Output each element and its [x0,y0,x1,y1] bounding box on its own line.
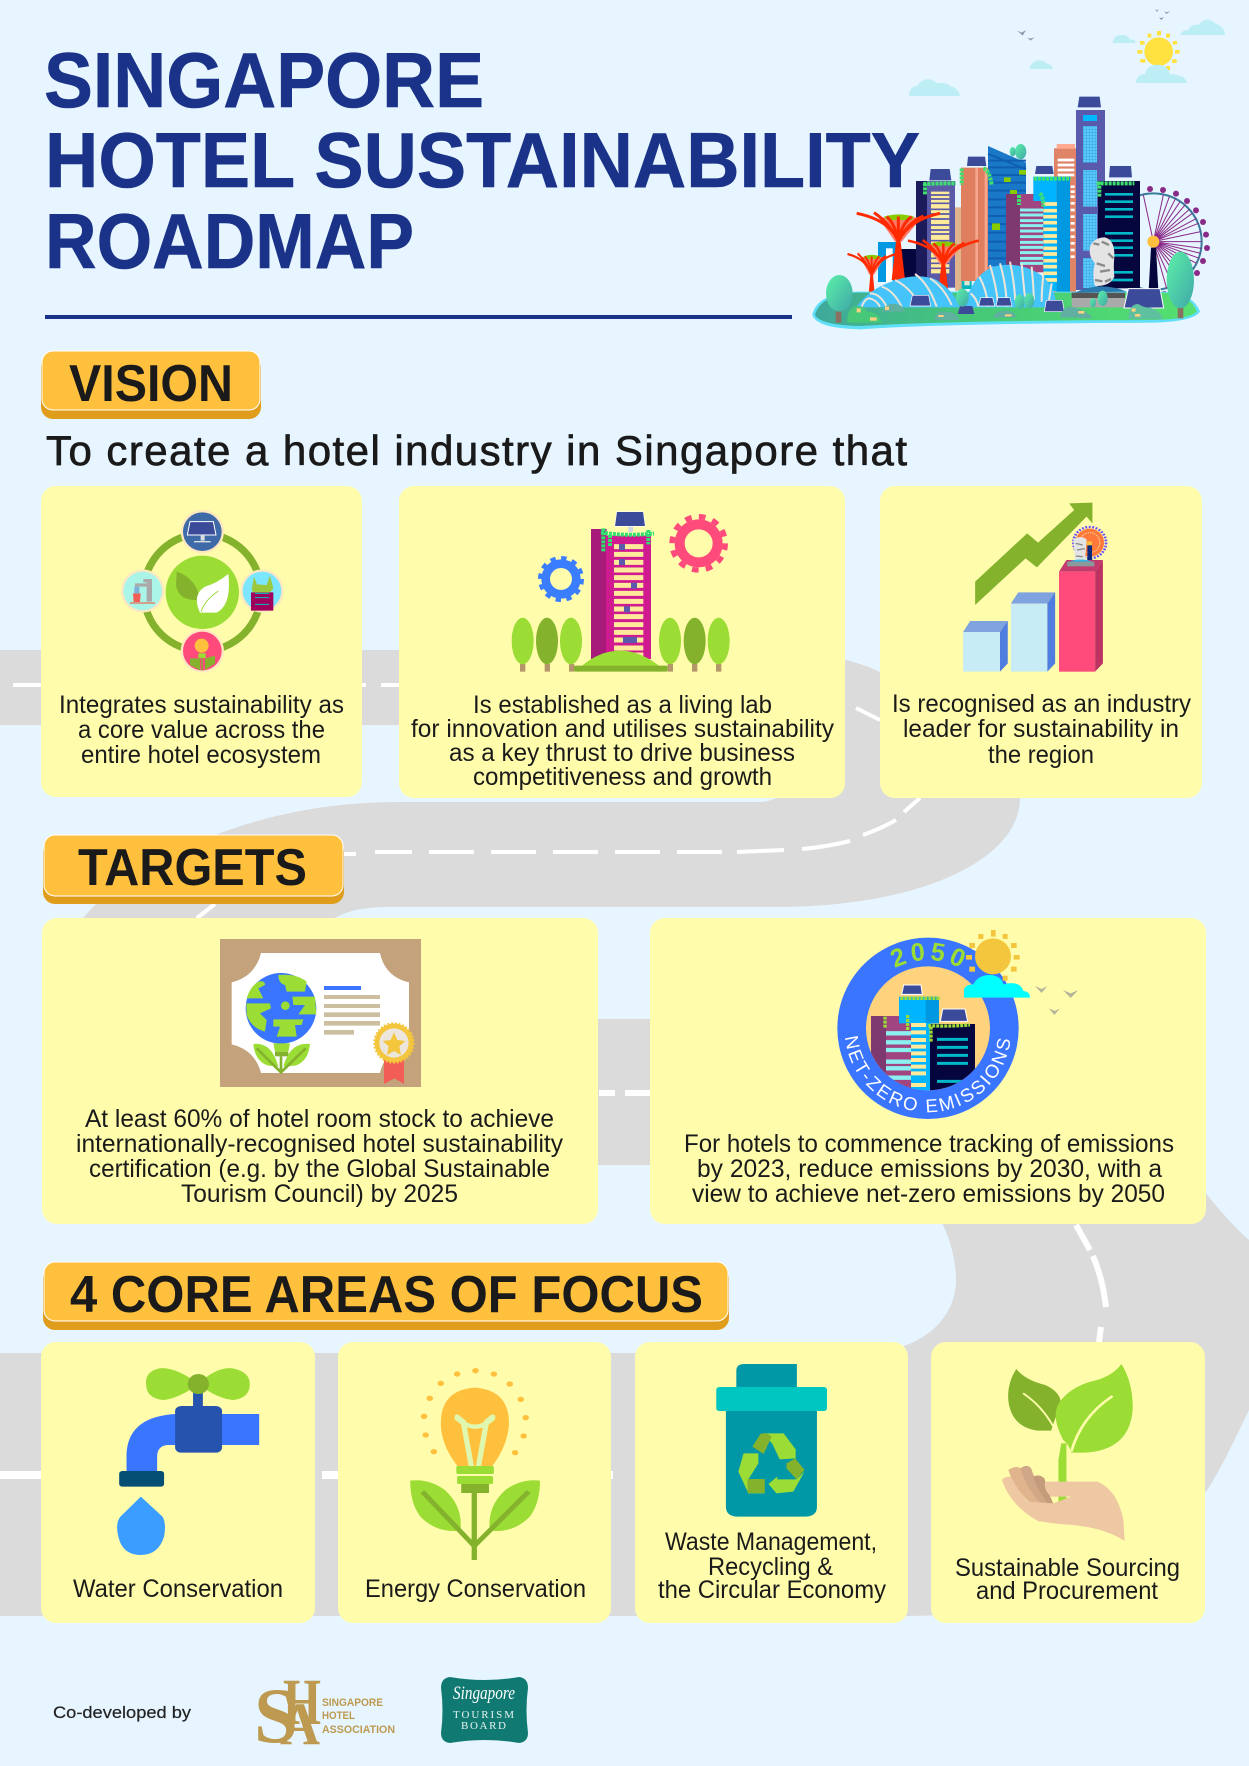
label: the Circular Economy [658,1576,886,1604]
label: Waste Management, [665,1528,877,1556]
focus areas heading: 4 CORE AREAS OF FOCUS [70,1266,703,1324]
card text [411,691,834,791]
solar panels and small trees [826,252,1194,323]
supertrees [847,213,979,304]
logo: Singapore Hotel Association: SINGAPORE [322,1697,383,1709]
card text [59,691,344,769]
logo: Singapore Hotel Association [254,1666,395,1759]
rooftop foliage [923,168,1134,207]
logo: Singapore Tourism Board: Singapore [453,1683,515,1704]
card text: view to achieve net-zero emissions by 2050 [692,1180,1165,1208]
card text: For hotels to commence tracking of emissions [684,1130,1174,1158]
panel: energy conservation [338,1342,611,1623]
clouds [909,20,1225,96]
icon: growth bar chart [963,503,1106,672]
panel: target net-zero [650,918,1206,1224]
ferris wheel [1105,186,1210,297]
sun [1137,31,1180,70]
label [658,1528,886,1604]
vision heading: VISION [69,355,233,413]
icon: net-zero badge: 2050 [890,942,965,968]
buildings [878,97,1140,305]
card text: Tourism Council) by 2025 [181,1180,458,1208]
icon: water tap [117,1368,259,1555]
gardens by the bay domes [856,262,1056,307]
logo: Singapore Tourism Board: TOURISM [453,1709,516,1721]
logo: Singapore Tourism Board: BOARD [461,1720,508,1732]
panel: sustainable sourcing [931,1342,1205,1623]
card text: as a key thrust to drive business [449,739,795,767]
co-developed by label: Co-developed by [53,1703,192,1722]
card text: for innovation and utilises sustainability [411,715,834,743]
icon: net-zero badge [837,930,1078,1119]
logo: Singapore Hotel Association: ASSOCIATION [322,1724,395,1736]
icon: net-zero badge: NET-ZERO EMISSIONS [845,1036,1010,1112]
card text: by 2023, reduce emissions by 2030, with a [697,1155,1162,1183]
card text: Integrates sustainability as [59,691,344,719]
card text: entire hotel ecosystem [81,741,321,769]
island [812,292,1200,329]
panel: vision card 1 [41,486,362,797]
card text: the region [988,741,1094,769]
card text [684,1130,1174,1208]
logo: Singapore Hotel Association: S [254,1672,298,1759]
panel: target certification [42,918,598,1224]
skyline illustration [812,9,1225,329]
label: and Procurement [976,1577,1158,1605]
label: Water Conservation [73,1575,283,1603]
title: SINGAPORE [44,36,484,124]
card text: At least 60% of hotel room stock to achieve [85,1105,554,1133]
label: Sustainable Sourcing [955,1554,1180,1582]
label: Energy Conservation [365,1575,586,1603]
card text [892,690,1191,769]
title [44,36,920,285]
merlion [1072,237,1127,307]
logo: Singapore Hotel Association: A [280,1691,320,1757]
card text [76,1105,563,1208]
panel: waste management [635,1342,908,1623]
title: ROADMAP [45,197,414,285]
card text: a core value across the [78,716,325,744]
road background [0,650,1249,1616]
targets heading [43,835,344,904]
icon: recycling bin [716,1364,827,1517]
targets heading: TARGETS [78,839,307,897]
bushes [847,304,1163,323]
label [955,1554,1180,1605]
icon: sustainability cycle [121,510,284,673]
panel: vision card 2 [399,486,845,798]
panel: vision card 3 [880,486,1202,798]
card text: internationally-recognised hotel sustainability [76,1130,563,1158]
icon: light bulb plant [410,1368,540,1560]
card text: Is recognised as an industry [892,690,1191,718]
logo: Singapore Hotel Association: HOTEL [322,1710,355,1722]
card text: Is established as a living lab [473,691,772,719]
icon: certificate [220,939,421,1087]
card text: certification (e.g. by the Global Sustainable [89,1155,550,1183]
vision heading [41,351,261,419]
logo: Singapore Hotel Association: H [283,1666,321,1739]
card text: competitiveness and growth [473,763,772,791]
birds [1017,9,1170,41]
title underline [45,315,792,319]
label: Recycling & [708,1553,833,1581]
panel: water conservation [41,1342,315,1623]
title: HOTEL SUSTAINABILITY [45,116,920,204]
icon: living lab tower [512,512,730,672]
icon: seedling in hand [1002,1364,1133,1541]
logo: Singapore Tourism Board [441,1677,528,1743]
vision subheading: To create a hotel industry in Singapore that [46,427,907,474]
card text: leader for sustainability in [903,715,1179,743]
